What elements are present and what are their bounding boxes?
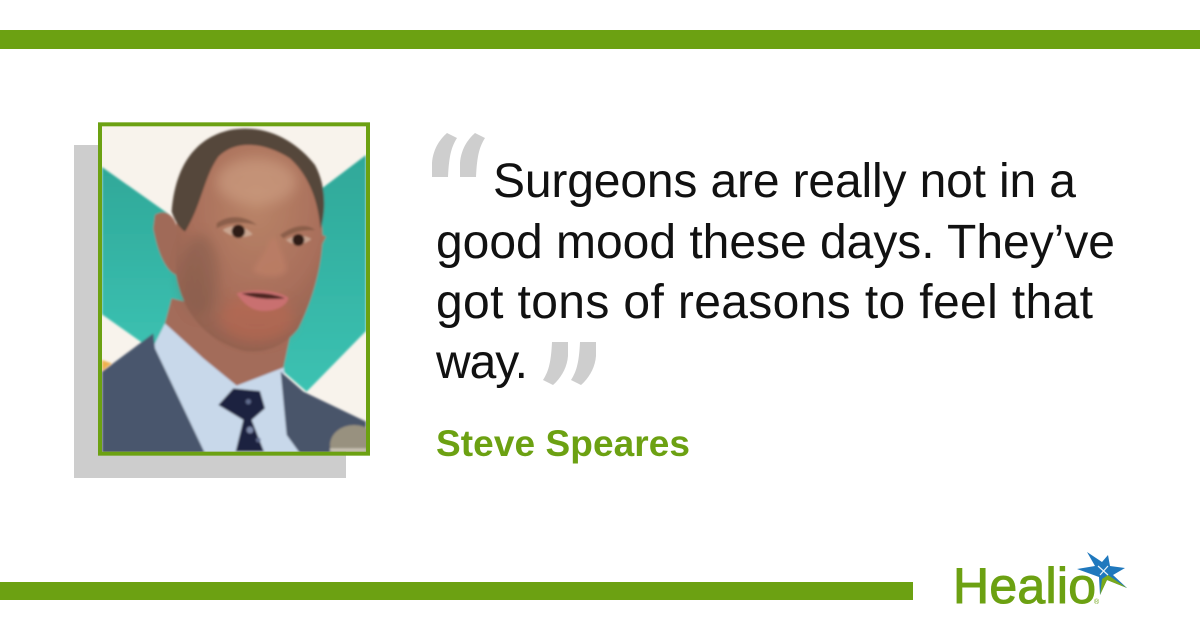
attribution name: Steve Speares [436,423,690,464]
registered mark: ® [1094,598,1100,606]
microphone [330,425,378,465]
face shading [222,302,292,342]
bottom green bar [0,582,913,600]
portrait photo with green frame [98,122,370,456]
quote text [435,155,1115,389]
mouth [237,290,288,311]
quote text: way. [435,336,528,389]
quote text: Surgeons are really not in a [493,155,1076,208]
shirt [153,323,303,455]
quote text: good mood these days. They’ve [436,216,1115,269]
ear left [153,212,178,275]
Healio logo [953,552,1127,608]
tie [218,388,265,452]
ear right [321,234,328,244]
top green bar [0,30,1200,49]
face [176,142,322,352]
logo star [1077,552,1127,595]
suit [102,333,205,453]
neck [165,298,292,386]
quote text: got tons of reasons to feel that [436,276,1093,329]
nose [256,246,285,275]
tie dots [246,399,251,404]
eyes [223,226,253,237]
opening quotation mark [432,133,485,177]
hair [172,129,324,232]
photo shadow panel [74,145,346,478]
brows [217,217,257,228]
closing quotation mark [543,342,596,385]
